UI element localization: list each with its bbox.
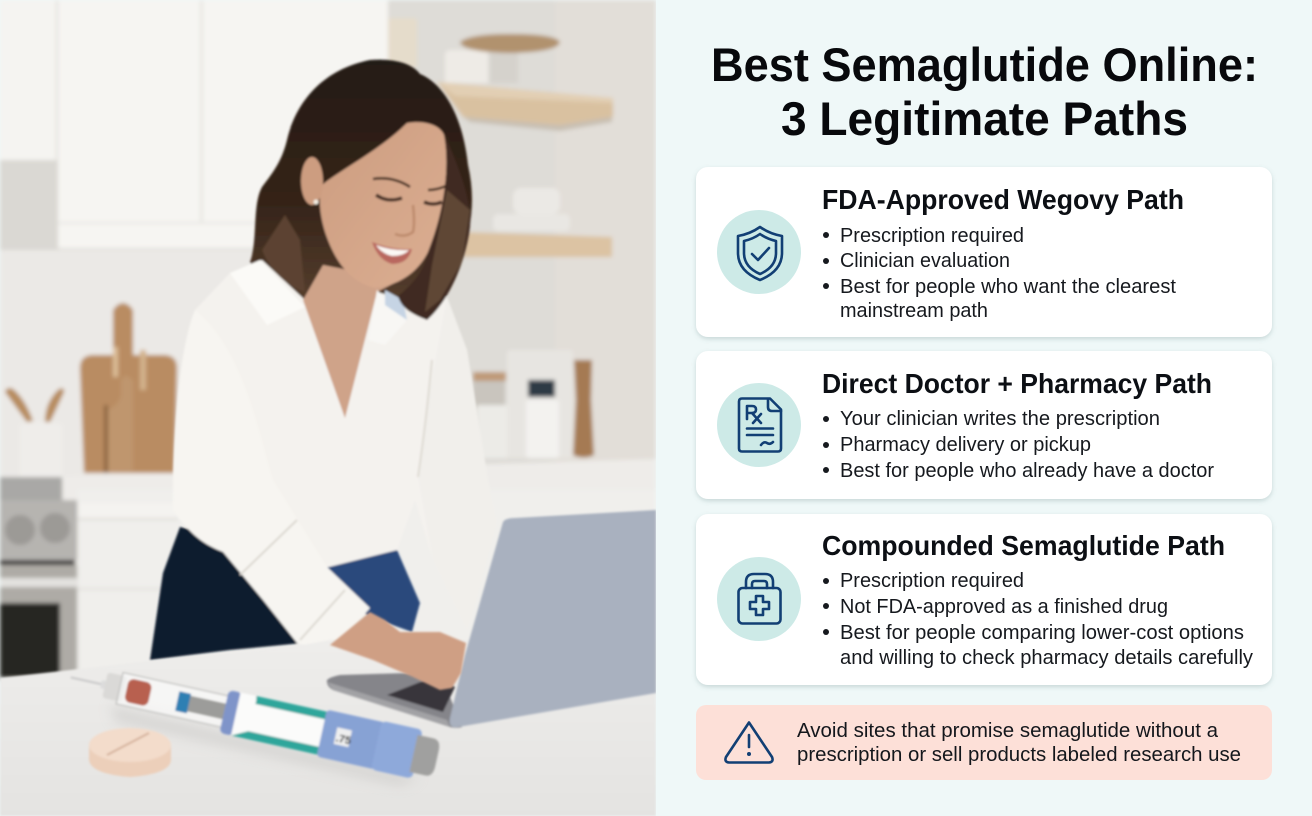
keyboard [387,677,455,712]
heading: Compounded Semaglutide Path [822,530,1225,561]
icon: prescription document [717,383,801,467]
bullet list: Best for people comparing lower-cost options [840,622,1244,644]
bullet list [823,570,1253,669]
tablet [89,728,171,777]
nose shadow [395,205,414,236]
bullet list: Clinician evaluation [840,250,1010,272]
trousers blue [325,550,420,632]
laptop [327,510,656,728]
title: 3 Legitimate Paths [781,92,1188,145]
bullet list: Your clinician writes the prescription [840,408,1160,430]
icon: medical bag [717,557,801,641]
back hair [250,60,472,320]
right panel background [656,0,1312,816]
canisters [473,373,505,408]
bullet list [823,225,1176,322]
front hair left highlights [262,215,305,292]
laptop base [327,672,462,728]
warning text [797,720,1241,766]
title: Best Semaglutide Online: [711,38,1258,91]
bullet list: Prescription required [840,570,1024,592]
panel: compounded semaglutide path [696,514,1272,685]
callout: warning [696,705,1272,780]
collars [230,260,305,325]
bullet list: Prescription required [840,225,1024,247]
bullet list: mainstream path [840,300,988,322]
title [711,38,1258,145]
kitchen background [0,0,656,680]
warning text: prescription or sell products labeled research use [797,744,1241,766]
stove [0,477,62,501]
left sleeve [173,310,370,655]
bullet list: and willing to check pharmacy details carefully [840,647,1253,669]
shelves and items [388,18,417,68]
bullet list: Not FDA-approved as a finished drug [840,596,1168,618]
hand typing [330,612,466,690]
icon: shield with check [717,210,801,294]
ear and earring [301,157,323,205]
chest and neck [303,265,400,418]
face [320,122,446,288]
cutting boards [80,303,177,473]
front hair right [398,133,470,320]
utensil crock [20,422,62,493]
photo: woman at kitchen counter with laptop, pen and tablet [0,0,656,816]
icon: warning triangle [725,722,773,762]
woman [150,60,497,660]
blouse body [175,260,497,630]
panel: direct doctor and pharmacy path [696,351,1272,499]
right sleeve [418,297,497,630]
panel: FDA-approved Wegovy path [696,167,1272,337]
trousers dark [150,527,340,660]
heading: FDA-Approved Wegovy Path [822,184,1184,215]
laptop lid [450,510,656,727]
bullet list: Pharmacy delivery or pickup [840,434,1091,456]
eyes and brows [373,178,448,190]
injection pen: .75 [335,732,352,747]
smile [372,242,412,264]
counter and lower cabinets [63,459,656,503]
bullet list [823,408,1214,482]
warning text: Avoid sites that promise semaglutide without a [797,720,1219,742]
pen shadow [110,705,420,786]
bullet list: Best for people who want the clearest [840,276,1176,298]
injection pen [65,653,442,783]
heading: Direct Doctor + Pharmacy Path [822,368,1212,399]
foreground counter [0,640,656,816]
bullet list: Best for people who already have a doctor [840,460,1214,482]
